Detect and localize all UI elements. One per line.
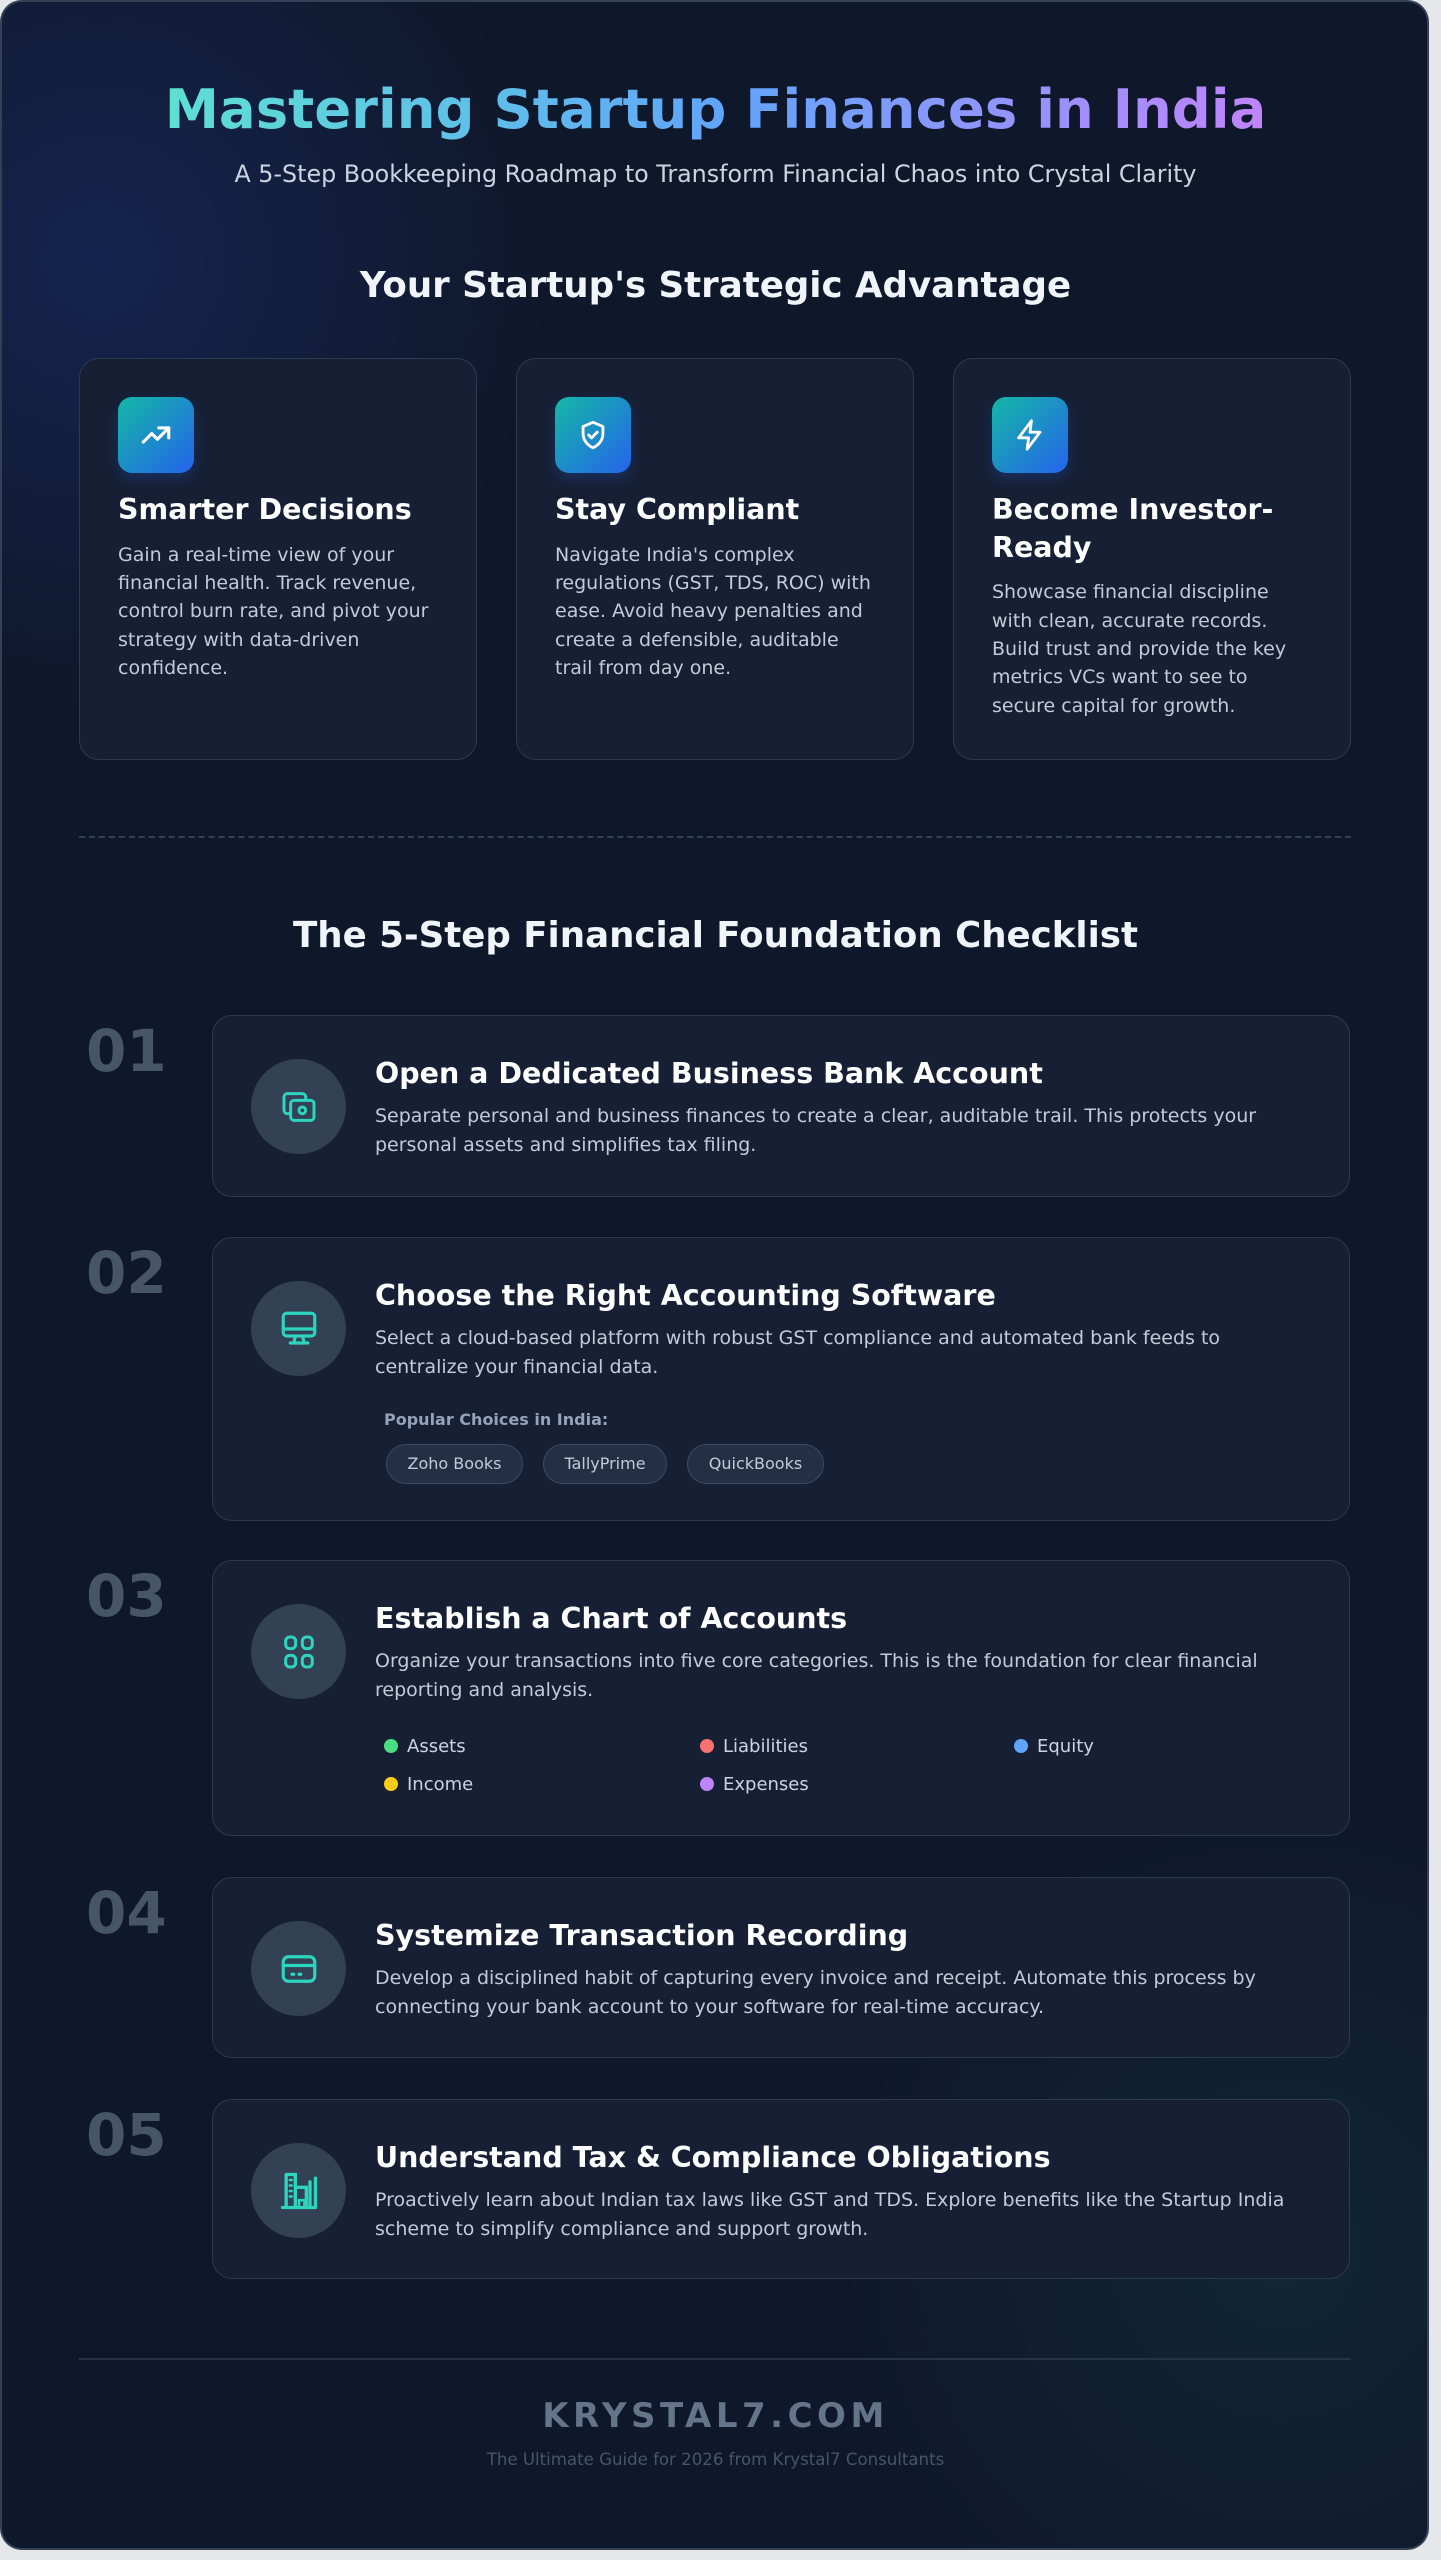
panel: step 5: [212, 2099, 1350, 2279]
bullet: liabilities: Liabilities: [723, 1736, 808, 1757]
heading: strategic advantage: Your Startup's Strategic Advantage: [360, 265, 1071, 306]
step text: scheme to simplify compliance and support growth.: [375, 2218, 868, 2240]
step number 03: 03: [86, 1562, 167, 1630]
icon: card: [251, 1921, 346, 2016]
step text: reporting and analysis.: [375, 1679, 593, 1701]
step text: [375, 1650, 1258, 1701]
footer brand: KRYSTAL7.COM: [542, 2396, 889, 2436]
card title: Ready: [992, 531, 1092, 564]
bullet: expenses: Expenses: [723, 1774, 809, 1795]
panel: investor ready: [953, 358, 1351, 760]
step title: Establish a Chart of Accounts: [375, 1602, 847, 1635]
card text: ease. Avoid heavy penalties and: [555, 600, 863, 622]
card text: regulations (GST, TDS, ROC) with: [555, 572, 871, 594]
step title: Systemize Transaction Recording: [375, 1919, 908, 1952]
icon: trending up: [118, 397, 194, 473]
card text: strategy with data-driven: [118, 629, 359, 651]
card text: [992, 581, 1286, 717]
card text: financial health. Track revenue,: [118, 572, 416, 594]
pill: tally: TallyPrime: [564, 1454, 646, 1473]
card title: Stay Compliant: [555, 493, 799, 526]
pill: tally: [543, 1444, 667, 1484]
card text: [555, 544, 871, 679]
step text: Develop a disciplined habit of capturing every invoice and receipt. Automate this process by: [375, 1967, 1256, 1989]
step number 01: 01: [86, 1017, 167, 1085]
card text: Build trust and provide the key: [992, 638, 1286, 660]
card text: with clean, accurate records.: [992, 610, 1267, 632]
icon: monitor: [251, 1281, 346, 1376]
pill: zoho: Zoho Books: [408, 1454, 501, 1473]
step number 02: 02: [86, 1239, 167, 1307]
card title: [992, 493, 1273, 564]
subtitle: A 5-Step Bookkeeping Roadmap to Transform Financial Chaos into Crystal Clarity: [234, 160, 1197, 188]
step text: [375, 1327, 1220, 1378]
step text: [375, 1967, 1256, 2018]
icon: grid: [251, 1604, 346, 1699]
icon: building: [251, 2143, 346, 2238]
bullet: income: Income: [407, 1774, 473, 1795]
panel: step 2: [212, 1237, 1350, 1521]
step text: Separate personal and business finances to create a clear, auditable trail. This protects your: [375, 1105, 1256, 1127]
step number 05: 05: [86, 2101, 167, 2169]
panel: step 4: [212, 1877, 1350, 2058]
card text: create a defensible, auditable: [555, 629, 839, 651]
step number 04: 04: [86, 1879, 167, 1947]
icon: bank: [251, 1059, 346, 1154]
pill: quickbooks: QuickBooks: [709, 1454, 802, 1473]
step text: centralize your financial data.: [375, 1356, 658, 1378]
step text: personal assets and simplifies tax filing.: [375, 1134, 756, 1156]
bullet: equity: Equity: [1037, 1736, 1094, 1757]
label: popular choices: Popular Choices in India:: [384, 1410, 608, 1429]
panel: smarter decisions: [79, 358, 477, 760]
icon: bolt: [992, 397, 1068, 473]
step title: Open a Dedicated Business Bank Account: [375, 1057, 1043, 1090]
card text: Navigate India's complex: [555, 544, 795, 566]
step text: [375, 2189, 1284, 2240]
step text: connecting your bank account to your software for real-time accuracy.: [375, 1996, 1044, 2018]
panel: step 1: [212, 1015, 1350, 1197]
card text: Gain a real-time view of your: [118, 544, 394, 566]
step text: [375, 1105, 1256, 1156]
step title: Understand Tax & Compliance Obligations: [375, 2141, 1051, 2174]
title: Mastering Startup Finances in India: [165, 77, 1266, 141]
pill: quickbooks: [687, 1444, 824, 1484]
card text: [118, 544, 428, 679]
bullet: assets: Assets: [407, 1736, 466, 1757]
step title: Choose the Right Accounting Software: [375, 1279, 996, 1312]
heading: checklist: The 5-Step Financial Foundation Checklist: [293, 915, 1138, 956]
card text: Showcase financial discipline: [992, 581, 1269, 603]
step text: Organize your transactions into five core categories. This is the foundation for clear financial: [375, 1650, 1258, 1672]
step text: Select a cloud-based platform with robust GST compliance and automated bank feeds to: [375, 1327, 1220, 1349]
card text: control burn rate, and pivot your: [118, 600, 428, 622]
step text: Proactively learn about Indian tax laws like GST and TDS. Explore benefits like the Startup India: [375, 2189, 1284, 2211]
card title: Become Investor-: [992, 493, 1273, 526]
pill: zoho: [386, 1444, 523, 1484]
panel: step 3: [212, 1560, 1350, 1836]
panel: stay compliant: [516, 358, 914, 760]
card title: Smarter Decisions: [118, 493, 412, 526]
card text: secure capital for growth.: [992, 695, 1235, 717]
card text: confidence.: [118, 657, 228, 679]
card text: trail from day one.: [555, 657, 731, 679]
card text: metrics VCs want to see to: [992, 666, 1248, 688]
footer tagline: The Ultimate Guide for 2026 from Krystal7 Consultants: [487, 2450, 944, 2469]
category list: [384, 1736, 1094, 1795]
icon: shield: [555, 397, 631, 473]
